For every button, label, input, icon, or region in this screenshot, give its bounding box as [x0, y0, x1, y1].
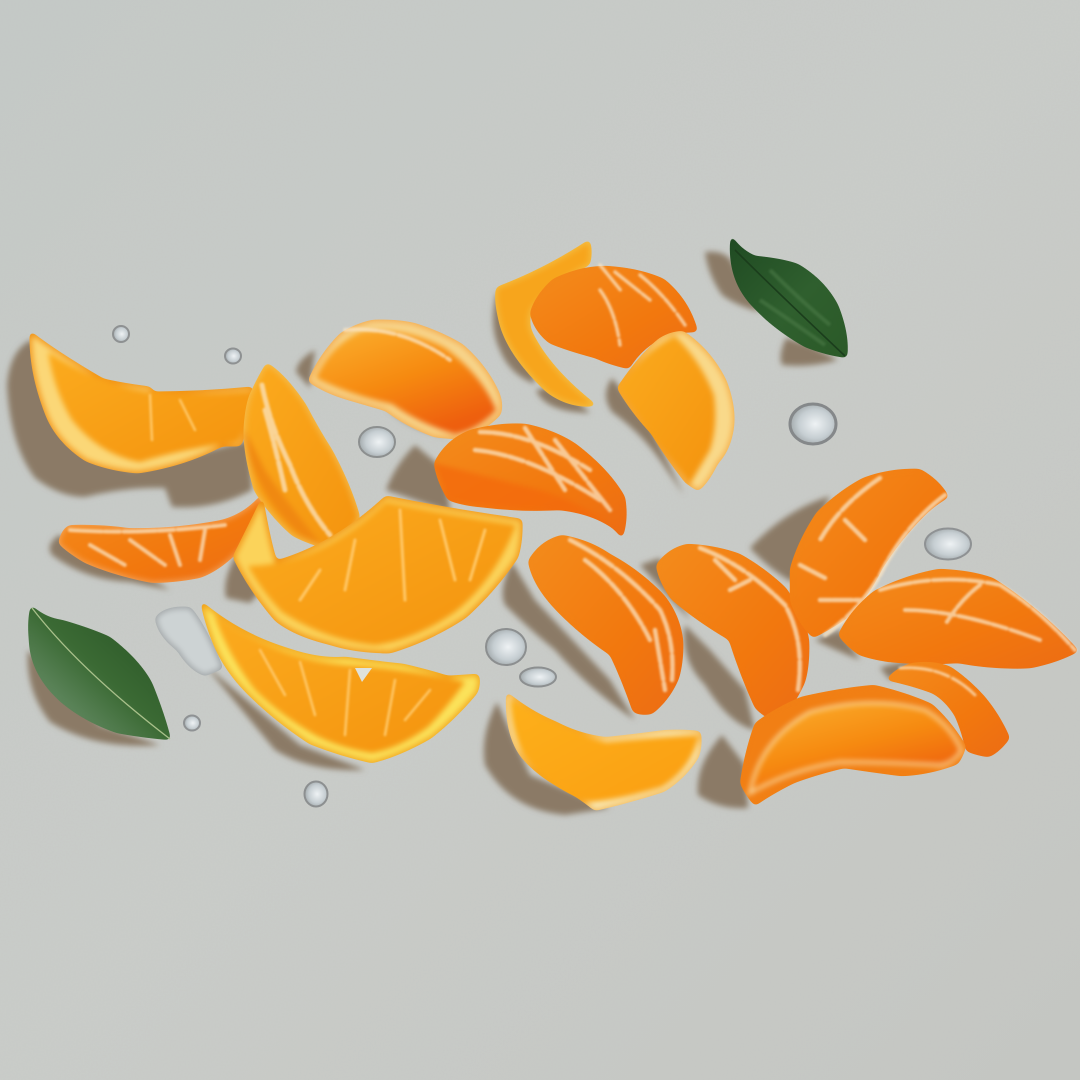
drop: bottom — [304, 782, 328, 806]
segment: right lower back — [886, 662, 1010, 757]
leaf: left — [28, 605, 171, 740]
drop: lower centre small — [520, 668, 556, 686]
segment: top cluster right — [618, 332, 733, 490]
segment: lower left — [59, 495, 263, 582]
drop: smear by lower wedge — [156, 608, 222, 675]
segment: top cluster centre — [530, 265, 698, 369]
drop: small beside upright segment — [225, 348, 241, 364]
drop: small upper left — [113, 326, 129, 342]
segment: far left wedge — [31, 333, 252, 472]
drop: lower centre — [486, 629, 526, 665]
leaf: top right — [730, 234, 848, 358]
segment: peel behind top cluster — [496, 241, 595, 405]
segment: right upper — [790, 469, 949, 638]
segment: right lower front — [740, 685, 966, 806]
drop: far right — [925, 528, 971, 560]
segment: lower centre crescent — [507, 693, 701, 810]
drop: large right — [790, 404, 836, 444]
segment: far right — [838, 569, 1079, 668]
segment: lower centre right — [656, 544, 809, 723]
water drops — [113, 326, 971, 806]
segment: central large wedge — [234, 497, 521, 652]
drop: centre left — [359, 427, 395, 457]
drop: tiny lower left — [184, 716, 200, 730]
segment: upper middle — [309, 321, 501, 438]
segment: lower left wedge — [202, 603, 479, 762]
segment: central top — [434, 424, 626, 539]
segment: upright left — [245, 364, 359, 550]
segment: lower centre left — [528, 535, 683, 715]
cast shadows — [7, 252, 915, 815]
